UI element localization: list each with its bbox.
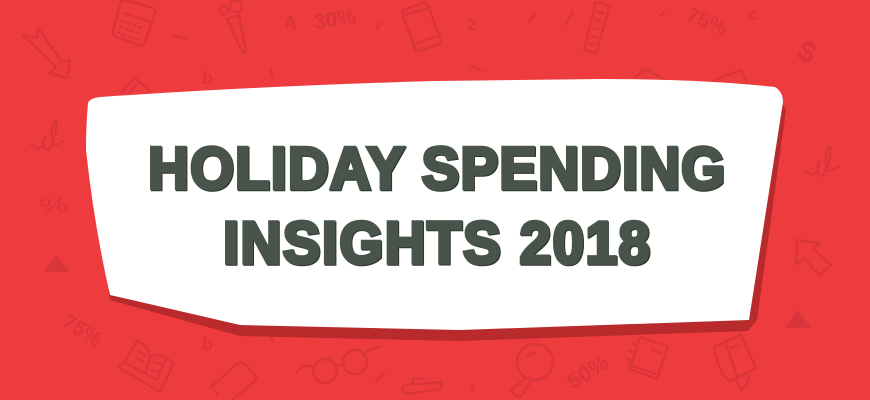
icon: dash [174, 36, 186, 39]
text: b bottom: b [202, 334, 213, 354]
icon: arrow right [796, 240, 831, 275]
icon: triangle right [785, 310, 812, 328]
icon: ice cream compass [220, 0, 246, 53]
icon: eraser [210, 362, 256, 400]
icon: bookmark book [714, 335, 756, 390]
icon: calculator [113, 0, 155, 45]
title line 2: INSIGHTS 2018 [223, 211, 650, 276]
text: dollar sign: $ [792, 34, 822, 71]
icon: tick [377, 23, 379, 29]
icon: ticks top [529, 11, 664, 24]
icon: phone [401, 2, 442, 52]
icon: partial book top [122, 78, 150, 92]
text: 2: 2 [467, 15, 476, 34]
icon: pen [402, 378, 442, 394]
title line 1: HOLIDAY SPENDING [148, 136, 725, 202]
text: 75% top: 75% [683, 3, 731, 41]
title line 2 shadow: INSIGHTS 2018 [224, 212, 651, 277]
icon: partial notebook top [635, 69, 747, 82]
icon: ruler [584, 2, 610, 53]
icon: scribble left [31, 121, 64, 150]
text: 75% bottom: 75% [58, 310, 106, 352]
text: A: A [284, 13, 297, 33]
text: 50%: 50% [562, 350, 613, 394]
title line 1 shadow: HOLIDAY SPENDING [149, 137, 726, 203]
icon: scribble right [805, 147, 840, 176]
icon: tick bottom [271, 337, 473, 393]
icon: notebook [627, 337, 668, 379]
text: c: c [748, 5, 757, 24]
title [148, 136, 726, 277]
white panel [86, 79, 783, 330]
text: b top: b [202, 68, 213, 88]
text: percent left: % [39, 194, 69, 217]
icon: triangle left [43, 255, 70, 272]
panel shadow [108, 100, 786, 341]
text: 30%: 30% [312, 5, 358, 34]
icon: glasses [297, 347, 381, 383]
icon: arrow top left [23, 28, 70, 78]
icon: magnifier [510, 344, 553, 398]
icon: open book [118, 341, 174, 392]
icon: tick upper [271, 67, 486, 77]
